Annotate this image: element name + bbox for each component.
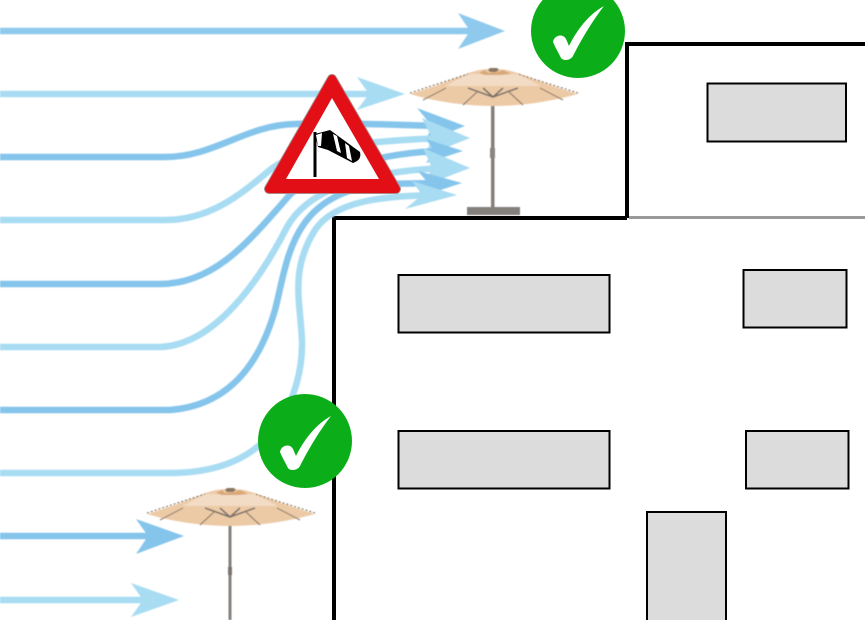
umbrella: ground: [147, 488, 315, 620]
streamline 4: [0, 148, 470, 347]
streamline 6: [0, 181, 457, 473]
streamline 1: [0, 108, 465, 157]
streamline 2: [0, 118, 470, 220]
building outline: [334, 44, 865, 620]
streamline 5: [0, 171, 462, 410]
warning sign: crosswind: [269, 79, 396, 189]
arrow: top straight: [0, 13, 505, 49]
windows: [398, 84, 848, 620]
streamline 3: [0, 139, 463, 284]
wind arrows: [0, 13, 505, 617]
arrow: second straight: [0, 77, 405, 110]
check badge: top: [531, 0, 625, 78]
arrow: lower dark: [0, 519, 184, 554]
check badge: lower: [258, 394, 352, 488]
umbrella: terrace: [410, 68, 578, 215]
icon: windsock: [314, 130, 360, 177]
arrow: lower light: [0, 583, 179, 617]
